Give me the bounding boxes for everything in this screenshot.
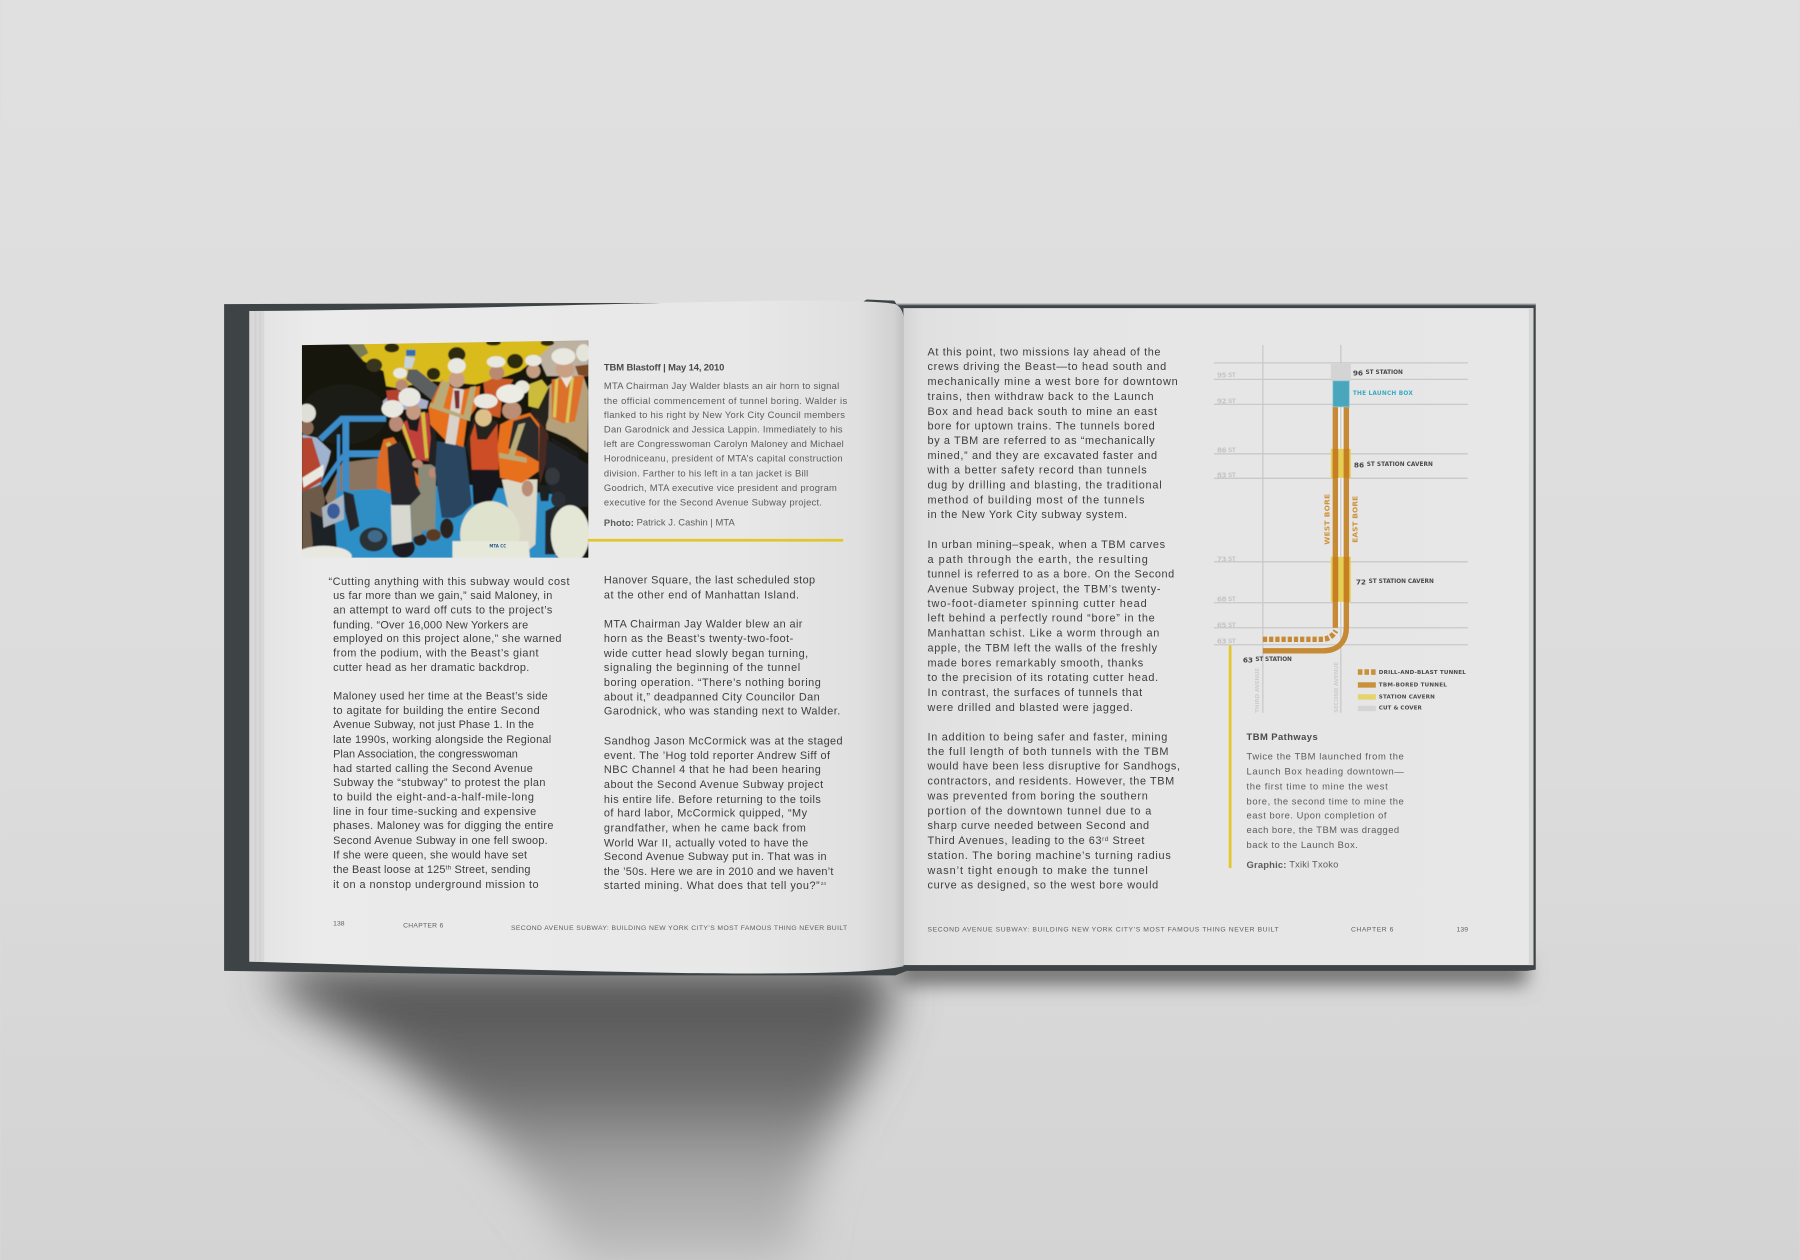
text column, page 139: apple, the TBM left the walls of the freshly — [928, 642, 1158, 654]
chart: TBM pathways tunnel map — [1214, 345, 1468, 713]
text column 2, page 138: boring operation. “There’s nothing boring — [604, 677, 821, 689]
footer, page 138: CHAPTER 6 — [403, 923, 444, 930]
footer, page 138 — [333, 920, 847, 932]
text column, page 139: would have been less disruptive for Sandhogs, — [927, 761, 1180, 773]
text column 1, page 138 — [329, 576, 570, 891]
sidebar: TBM Pathways — [1247, 731, 1404, 870]
text column, page 139: Street — [1109, 835, 1144, 847]
photo: officials at the TBM launch — [295, 338, 591, 568]
rear people — [546, 376, 588, 453]
drill-and-blast dashes — [1263, 631, 1336, 639]
text column 1, page 138: from the podium, with the Beast’s giant — [333, 648, 539, 660]
street labels: 83 ST — [1217, 470, 1237, 479]
text column, page 139: bore for uptown trains. The tunnels bored — [928, 420, 1155, 432]
photo: officials at the TBM launch: MTA CC — [489, 543, 506, 548]
street labels: 95 ST — [1217, 370, 1237, 379]
text column, page 139 — [927, 346, 1180, 891]
sidebar heading: TBM Pathways — [1247, 731, 1318, 742]
footer, page 139 — [928, 927, 1468, 934]
station caverns — [1331, 449, 1351, 478]
text column, page 139: In urban mining–speak, when a TBM carves — [928, 539, 1166, 551]
text column, page 139: rd — [1102, 835, 1109, 842]
footer, page 138: 138 — [333, 920, 345, 927]
text column, page 139: contractors, and residents. However, the TBM — [928, 775, 1174, 787]
text column 2, page 138: signaling the beginning of the tunnel — [604, 662, 800, 674]
text column, page 139: by a TBM are referred to as “mechanically — [928, 435, 1155, 447]
street labels — [1217, 370, 1237, 645]
chart: TBM pathways tunnel map: EAST BORE — [1350, 496, 1359, 543]
street labels: 86 ST — [1217, 445, 1237, 454]
center man — [435, 441, 472, 518]
text column 1, page 138: Subway the “stubway” to protest the plan — [333, 777, 545, 789]
station labels: 63 ST STATION — [1243, 655, 1292, 664]
text column 1, page 138: to agitate for building the entire Second — [333, 705, 540, 717]
text column 2, page 138: the ’50s. Here we are in 2010 and we haven’t — [604, 866, 833, 878]
legend: TBM-BORED TUNNEL — [1379, 683, 1447, 689]
man in back left — [383, 390, 428, 409]
text column, page 139: mined,” and they are excavated faster and — [928, 450, 1157, 462]
foreground hard hats — [302, 544, 353, 558]
text column 1, page 138: “Cutting anything with this subway would cost — [329, 576, 570, 588]
woman in the middle — [472, 469, 501, 504]
text column 2, page 138: Garodnick, who was standing next to Walder. — [604, 705, 840, 717]
text column 1, page 138: line in four time-sucking and expensive — [333, 806, 536, 818]
text column 1, page 138: an attempt to ward off cuts to the project’s — [333, 604, 553, 616]
text column, page 139: Avenue Subway project, the TBM’s twenty- — [928, 583, 1161, 595]
raised arm with air horn — [406, 369, 442, 403]
street labels: 63 ST — [1217, 636, 1237, 645]
photo caption: Goodrich, MTA executive vice president and program — [604, 482, 837, 493]
footer, page 139: 139 — [1457, 927, 1468, 934]
text column, page 139: a path through the earth, the resulting — [928, 554, 1148, 566]
floor and railings — [324, 457, 380, 504]
photo caption: Dan Garodnick and Jessica Lappin. Immediately to his — [604, 424, 843, 435]
legend — [1358, 669, 1466, 712]
man right front — [502, 479, 537, 552]
text column 2, page 138: about the Second Avenue Subway project — [604, 779, 823, 791]
text column 2, page 138: at the other end of Manhattan Island. — [604, 590, 799, 602]
text column 2, page 138: MTA Chairman Jay Walder blew an air — [604, 618, 803, 630]
avenue labels: THIRD AVENUE — [1255, 668, 1261, 713]
text column 2, page 138: started mining. What does that tell you?” — [604, 880, 820, 892]
photo caption: executive for the Second Avenue Subway project. — [604, 497, 822, 508]
text column 1, page 138: Plan Association, the congresswoman — [333, 749, 518, 761]
text column 2, page 138 — [603, 575, 843, 892]
station labels: THE LAUNCH BOX — [1353, 391, 1413, 397]
text column 2, page 138: Sandhog Jason McCormick was at the staged — [604, 735, 843, 747]
text column, page 139: was prevented from boring the southern — [927, 790, 1148, 802]
text column, page 139: dug by drilling and blasting, the traditional — [928, 479, 1162, 491]
left partial figure — [302, 434, 331, 494]
text column, page 139: trains, then withdraw back to the Launch — [928, 391, 1154, 403]
text column, page 139: In contrast, the surfaces of tunnels that — [928, 687, 1142, 699]
man in red vest — [417, 464, 436, 531]
text column 1, page 138: cutter head as her dramatic backdrop. — [333, 662, 529, 674]
text column 2, page 138: wide cutter head slowly began turning, — [603, 648, 808, 660]
sign and microphones — [310, 511, 337, 551]
text column 1, page 138: th — [446, 864, 452, 871]
sidebar: TBM Pathways: east bore. Upon completion of — [1247, 809, 1387, 820]
text column, page 139: method of building most of the tunnels — [928, 494, 1145, 506]
text column 1, page 138: it on a nonstop underground mission to — [333, 879, 539, 891]
text column 2, page 138: Hanover Square, the last scheduled stop — [604, 575, 815, 587]
chart: TBM pathways tunnel map: SECOND AVENUE — [1334, 662, 1340, 713]
text column, page 139: were drilled and blasted were jagged. — [927, 702, 1133, 714]
text column, page 139: station. The boring machine’s turning radius — [928, 850, 1171, 862]
street labels: 65 ST — [1217, 620, 1237, 629]
station labels — [1243, 368, 1434, 664]
text column 2, page 138: NBC Channel 4 that he had been hearing — [604, 764, 821, 776]
text column, page 139: In addition to being safer and faster, mining — [928, 731, 1167, 743]
text column 1, page 138: If she were queen, she would have set — [333, 849, 527, 861]
photo caption: Horodniceanu, president of MTA’s capital construction — [604, 452, 843, 463]
sidebar: TBM Pathways: the first time to mine the west — [1247, 781, 1388, 792]
text column 2, page 138: grandfather, when he came back from — [604, 823, 806, 835]
bored tunnels — [1263, 407, 1346, 651]
woman front left — [391, 504, 412, 545]
text column 2, page 138: World War II, actually voted to have the — [604, 837, 808, 849]
text column 2, page 138: of hard labor, McCormick quipped, “My — [604, 808, 808, 820]
sidebar: TBM Pathways: back to the Launch Box. — [1247, 839, 1358, 850]
text column, page 139: to the precision of its rotating cutter head. — [928, 672, 1158, 684]
text column 1, page 138: the Beast loose at 125 — [333, 864, 446, 876]
text column 1, page 138: to build the eight-and-a-half-mile-long — [333, 792, 534, 804]
text column, page 139: the full length of both tunnels with the TBM — [928, 746, 1169, 758]
street labels: 73 ST — [1217, 554, 1237, 563]
legend: DRILL-AND-BLAST TUNNEL — [1379, 670, 1466, 676]
text column, page 139: portion of the downtown tunnel due to a — [928, 805, 1152, 817]
footer, page 139: SECOND AVENUE SUBWAY: BUILDING NEW YORK CITY’S MOST FAMOUS THING NEVER BUILT — [928, 927, 1279, 934]
text column 1, page 138: Street, sending — [451, 864, 530, 876]
text column, page 139: with a better safety record than tunnels — [927, 464, 1147, 476]
sidebar: TBM Pathways: Launch Box heading downtown— — [1247, 766, 1404, 777]
photo caption — [604, 362, 848, 528]
news cameras — [545, 439, 588, 511]
text column 1, page 138: phases. Maloney was for digging the entire — [333, 820, 553, 832]
text column 2, page 138: Second Avenue Subway put in. That was in — [604, 851, 827, 863]
photo caption: MTA Chairman Jay Walder blasts an air horn to signal — [604, 380, 839, 391]
bore labels: WEST BORE — [1322, 494, 1331, 545]
text column 1, page 138: late 1990s, working alongside the Regional — [333, 734, 551, 746]
book cover — [224, 300, 1536, 975]
text column 2, page 138: horn as the Beast’s twenty-two-foot- — [604, 633, 794, 645]
text column, page 139: Third Avenues, leading to the 63 — [928, 835, 1102, 847]
text column, page 139: in the New York City subway system. — [928, 509, 1127, 521]
text column, page 139: At this point, two missions lay ahead of the — [928, 346, 1160, 358]
footer, page 138: SECOND AVENUE SUBWAY: BUILDING NEW YORK CITY’S MOST FAMOUS THING NEVER BUILT — [511, 925, 847, 932]
photo caption: left are Congresswoman Carolyn Maloney and Michael — [604, 438, 844, 449]
text column 1, page 138: us far more than we gain,” said Maloney, in — [333, 590, 552, 602]
sidebar: TBM Pathways: each bore, the TBM was dragged — [1247, 824, 1399, 835]
legend: STATION CAVERN — [1379, 695, 1435, 701]
street labels: 68 ST — [1217, 594, 1237, 603]
sidebar: TBM Pathways: bore, the second time to mine the — [1247, 795, 1404, 806]
text column, page 139: sharp curve needed between Second and — [928, 820, 1149, 832]
text column 1, page 138: Avenue Subway, not just Phase 1. In the — [333, 719, 534, 731]
photo caption: Photo: Patrick J. Cashin | MTA — [604, 517, 735, 528]
text column, page 139: two-foot-diameter spinning cutter head — [928, 598, 1147, 610]
photo caption: division. Farther to his left in a tan jacket is Bill — [604, 467, 808, 478]
text column 1, page 138: Maloney used her time at the Beast’s side — [333, 691, 548, 703]
sidebar: TBM Pathways: Graphic: Txiki Txoko — [1247, 859, 1338, 870]
text column, page 139: made bores remarkably smooth, thanks — [928, 657, 1144, 669]
sidebar: TBM Pathways: Twice the TBM launched from the — [1247, 751, 1404, 762]
panel: left page — [249, 301, 903, 974]
book shadow — [267, 959, 1527, 1260]
cut and cover block — [1331, 364, 1351, 381]
text column, page 139: left behind a perfectly round “bore” in the — [928, 613, 1155, 625]
text column 2, page 138: his entire life. Before returning to the toils — [604, 794, 821, 806]
gap between bores — [1338, 407, 1344, 627]
yellow rule under caption — [588, 539, 843, 542]
caption heading: TBM Blastoff | May 14, 2010 — [604, 362, 724, 373]
text column, page 139: crews driving the Beast—to head south and — [928, 361, 1166, 373]
street labels: 92 ST — [1217, 396, 1237, 405]
text column, page 139: Box and head back south to mine an east — [928, 406, 1157, 418]
station labels: 86 ST STATION CAVERN — [1354, 460, 1433, 469]
legend: CUT & COVER — [1379, 706, 1423, 712]
text column 2, page 138: about it,” deadpanned City Councilor Dan — [604, 692, 820, 704]
text column 2, page 138: event. The ’Hog told reporter Andrew Siff of — [604, 750, 831, 762]
text column, page 139: tunnel is referred to as a bore. On the Second — [928, 568, 1174, 580]
text column 1, page 138: employed on this project alone,” she warned — [333, 633, 561, 645]
launch box — [1333, 381, 1349, 407]
text column 1, page 138: had started calling the Second Avenue — [333, 763, 533, 775]
station labels: 96 ST STATION — [1353, 368, 1403, 377]
text column, page 139: Manhattan schist. Like a worm through an — [928, 627, 1159, 639]
yellow sidebar rule — [1229, 645, 1232, 868]
text column, page 139: mechanically mine a west bore for downtown — [928, 376, 1178, 388]
text column, page 139: wasn’t tight enough to make the tunnel — [927, 865, 1148, 877]
photo caption: the official commencement of tunnel boring. Walder is — [604, 395, 848, 406]
photo caption: flanked to his right by New York City Council members — [604, 409, 845, 420]
panel: right page — [903, 308, 1533, 965]
footer, page 139: CHAPTER 6 — [1351, 927, 1394, 934]
text column 2, page 138: 24 — [821, 881, 826, 886]
text column 1, page 138: funding. “Over 16,000 New Yorkers are — [333, 619, 528, 631]
text column, page 139: curve as designed, so the west bore would — [928, 879, 1158, 891]
text column 1, page 138: Second Avenue Subway in one fell swoop. — [333, 835, 548, 847]
darker tunnel sections through caverns — [1333, 449, 1349, 602]
station labels: 72 ST STATION CAVERN — [1356, 577, 1434, 586]
